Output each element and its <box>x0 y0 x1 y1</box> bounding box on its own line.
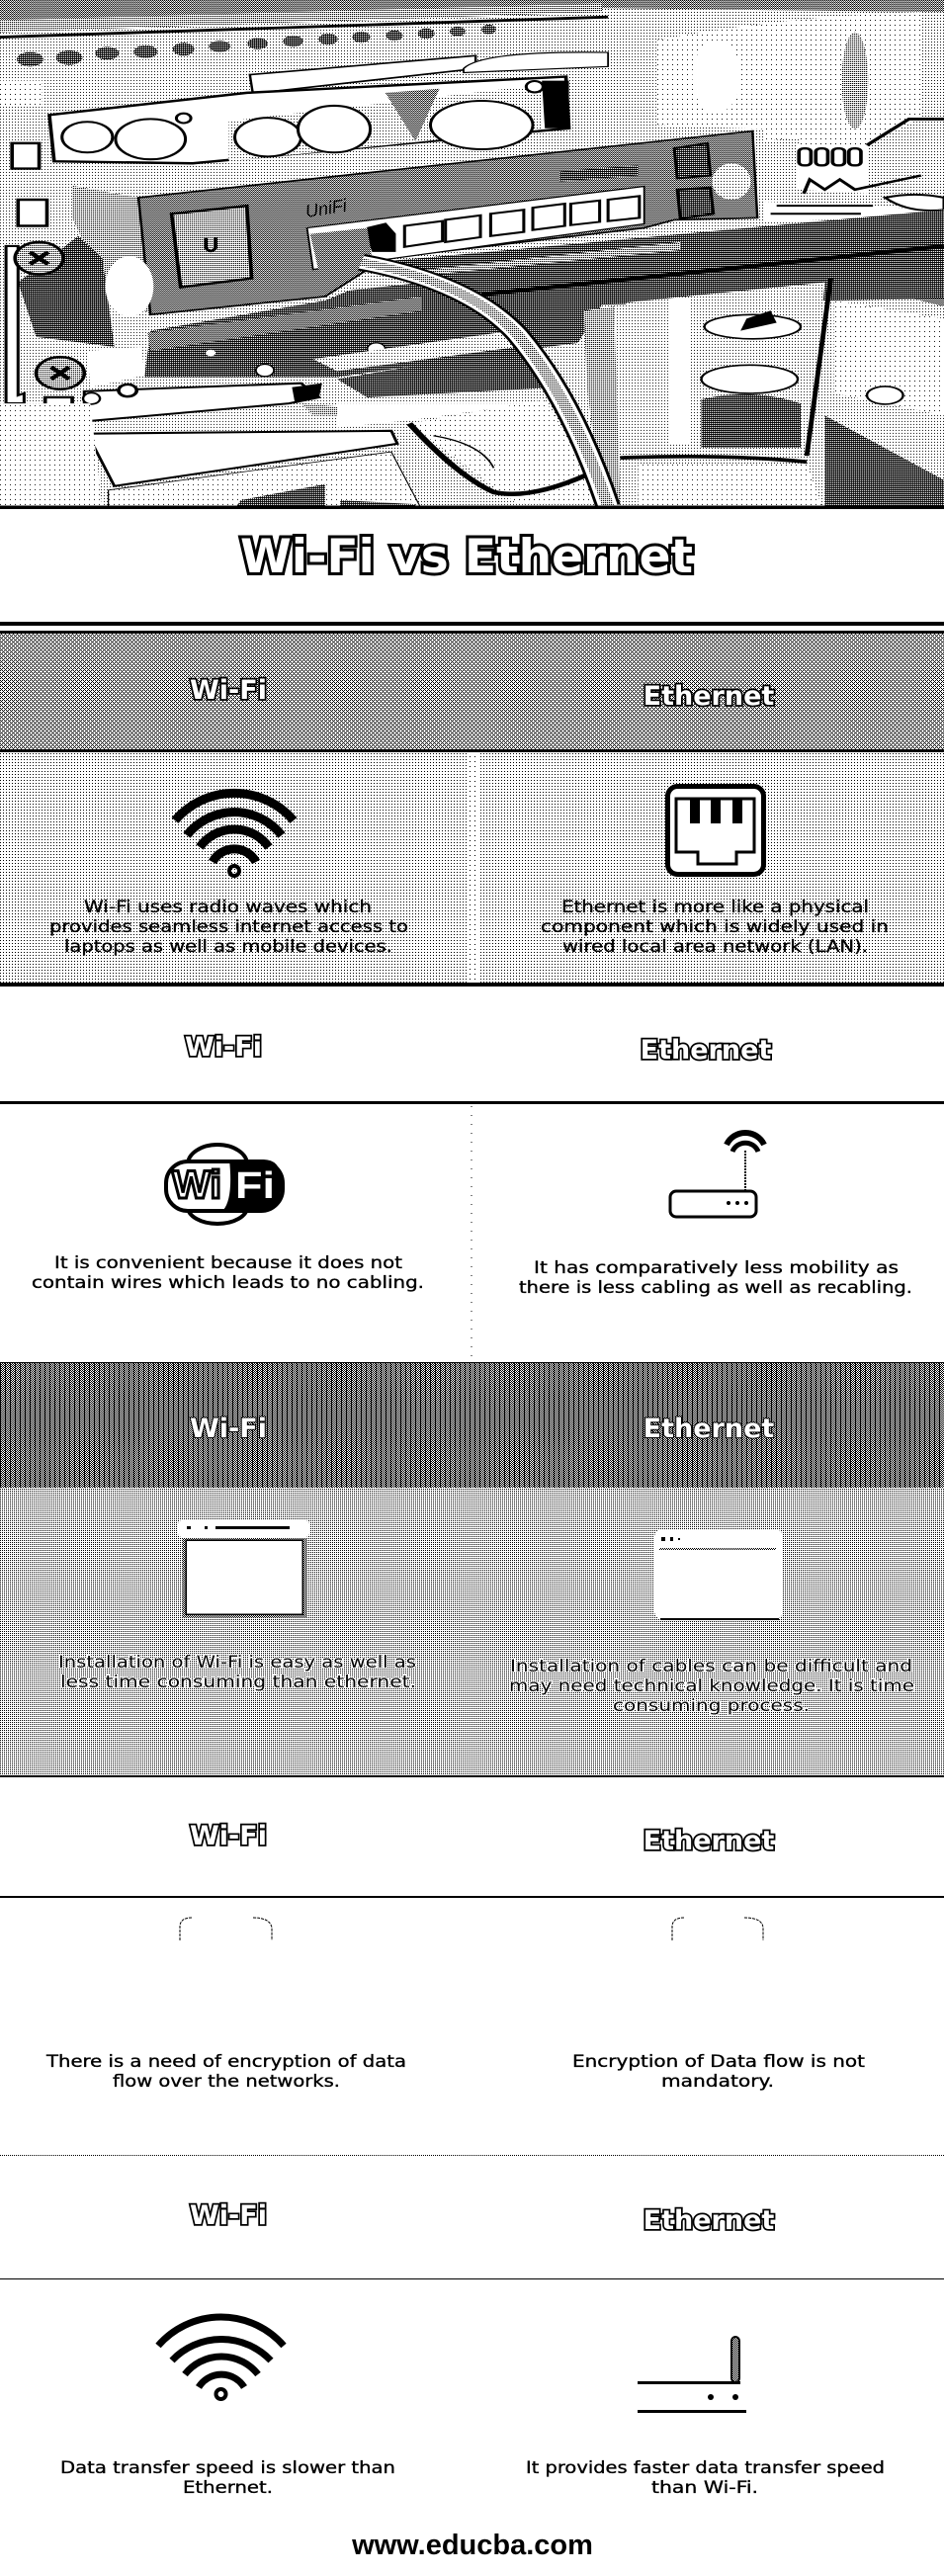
icon: Wi-Fi logo <box>166 1145 283 1224</box>
row 1 Wi-Fi label: Wi-Fi <box>190 675 267 706</box>
row 4 Ethernet text <box>572 2052 865 2092</box>
row 5 Ethernet label: Ethernet <box>644 2205 774 2236</box>
row 3 header band <box>0 1363 944 1488</box>
row 2 Wi-Fi label: Wi-Fi <box>185 1032 262 1063</box>
photo label: UniFi brand on switch: UniFi <box>303 195 349 221</box>
row 1 panel <box>0 634 944 987</box>
row 5 Wi-Fi label: Wi-Fi <box>190 2200 267 2231</box>
row 1 Ethernet text: component which is widely used in <box>541 917 889 937</box>
row 3 panel <box>0 1362 944 1777</box>
row 1 Wi-Fi text: provides seamless internet access to <box>49 917 408 937</box>
row 1 body background <box>0 752 944 983</box>
icon: RJ45 socket <box>668 787 763 874</box>
row 1 Ethernet label: Ethernet <box>644 681 774 712</box>
icon: faint padlock outline Ethernet <box>672 1918 763 1940</box>
row 2 Ethernet text <box>519 1258 912 1298</box>
photo: Ethernet switch in a rack <box>0 0 944 509</box>
row 4 Wi-Fi text: flow over the networks. <box>113 2072 340 2092</box>
row 1 Wi-Fi text: Wi-Fi uses radio waves which <box>84 898 372 917</box>
icon: router with antenna <box>670 1133 764 1217</box>
icon: Wi-Fi signal flat <box>158 2317 284 2399</box>
row 3 Ethernet label: Ethernet <box>644 1414 774 1444</box>
icon: browser window Ethernet <box>654 1529 783 1620</box>
icon: router flat <box>638 2337 746 2413</box>
row 2 Wi-Fi text: It is convenient because it does not <box>54 1253 402 1273</box>
row 5 Wi-Fi text: Ethernet. <box>183 2478 273 2498</box>
row 3 body background <box>0 1488 944 1775</box>
row 1 Ethernet text: Ethernet is more like a physical <box>561 898 869 917</box>
row 1 Ethernet text <box>541 898 889 957</box>
row 3 Ethernet text: consuming process. <box>613 1696 810 1716</box>
icon: faint padlock outline Wi-Fi <box>180 1918 272 1940</box>
title: Wi-Fi vs Ethernet <box>240 530 693 584</box>
row 4 panel <box>0 1821 944 2155</box>
row 3 Ethernet text: may need technical knowledge. It is time <box>509 1676 914 1696</box>
row 2 panel <box>0 1032 944 1362</box>
row 1 Ethernet text: wired local area network (LAN). <box>562 937 868 957</box>
row 5 Wi-Fi text: Data transfer speed is slower than <box>60 2458 395 2478</box>
row 2 Wi-Fi text <box>32 1253 424 1293</box>
row 2 Wi-Fi text: contain wires which leads to no cabling. <box>32 1273 424 1293</box>
row 1 Wi-Fi text <box>49 898 408 957</box>
row 1 Wi-Fi text: laptops as well as mobile devices. <box>64 937 392 957</box>
row 3 Ethernet text: Installation of cables can be difficult and <box>510 1657 912 1676</box>
row 4 Wi-Fi text <box>45 2052 406 2092</box>
icon: Wi-Fi signal <box>175 793 294 876</box>
row 3 Wi-Fi label: Wi-Fi <box>190 1414 267 1444</box>
row 5 panel <box>0 2200 944 2498</box>
row 2 Ethernet text: there is less cabling as well as recabling. <box>519 1278 912 1298</box>
row 2 Ethernet text: It has comparatively less mobility as <box>534 1258 899 1278</box>
row 5 Ethernet text: than Wi-Fi. <box>651 2478 758 2498</box>
footer website: www.educba.com <box>351 2530 593 2561</box>
row 3 Wi-Fi text: less time consuming than ethernet. <box>60 1673 416 1692</box>
row 5 Ethernet text <box>526 2458 885 2498</box>
icon: Wi-Fi logo: Fi <box>235 1165 275 1207</box>
row 2 Ethernet label: Ethernet <box>641 1035 771 1066</box>
row 3 Wi-Fi text <box>58 1653 416 1692</box>
row 5 Ethernet text: It provides faster data transfer speed <box>526 2458 885 2478</box>
row 3 Wi-Fi text: Installation of Wi-Fi is easy as well as <box>58 1653 416 1673</box>
row 4 Wi-Fi label: Wi-Fi <box>190 1821 267 1851</box>
row 4 Wi-Fi text: There is a need of encryption of data <box>45 2052 406 2072</box>
top double rule <box>0 622 944 634</box>
row 4 Ethernet text: mandatory. <box>661 2072 774 2092</box>
row 4 Ethernet text: Encryption of Data flow is not <box>572 2052 865 2072</box>
row 5 Wi-Fi text <box>60 2458 395 2498</box>
icon: browser window Wi-Fi <box>178 1520 309 1618</box>
icon: Wi-Fi logo: Wi <box>172 1163 221 1207</box>
row 3 Ethernet text <box>509 1657 914 1716</box>
row 4 Ethernet label: Ethernet <box>644 1826 774 1856</box>
row 1 header band <box>0 634 944 749</box>
